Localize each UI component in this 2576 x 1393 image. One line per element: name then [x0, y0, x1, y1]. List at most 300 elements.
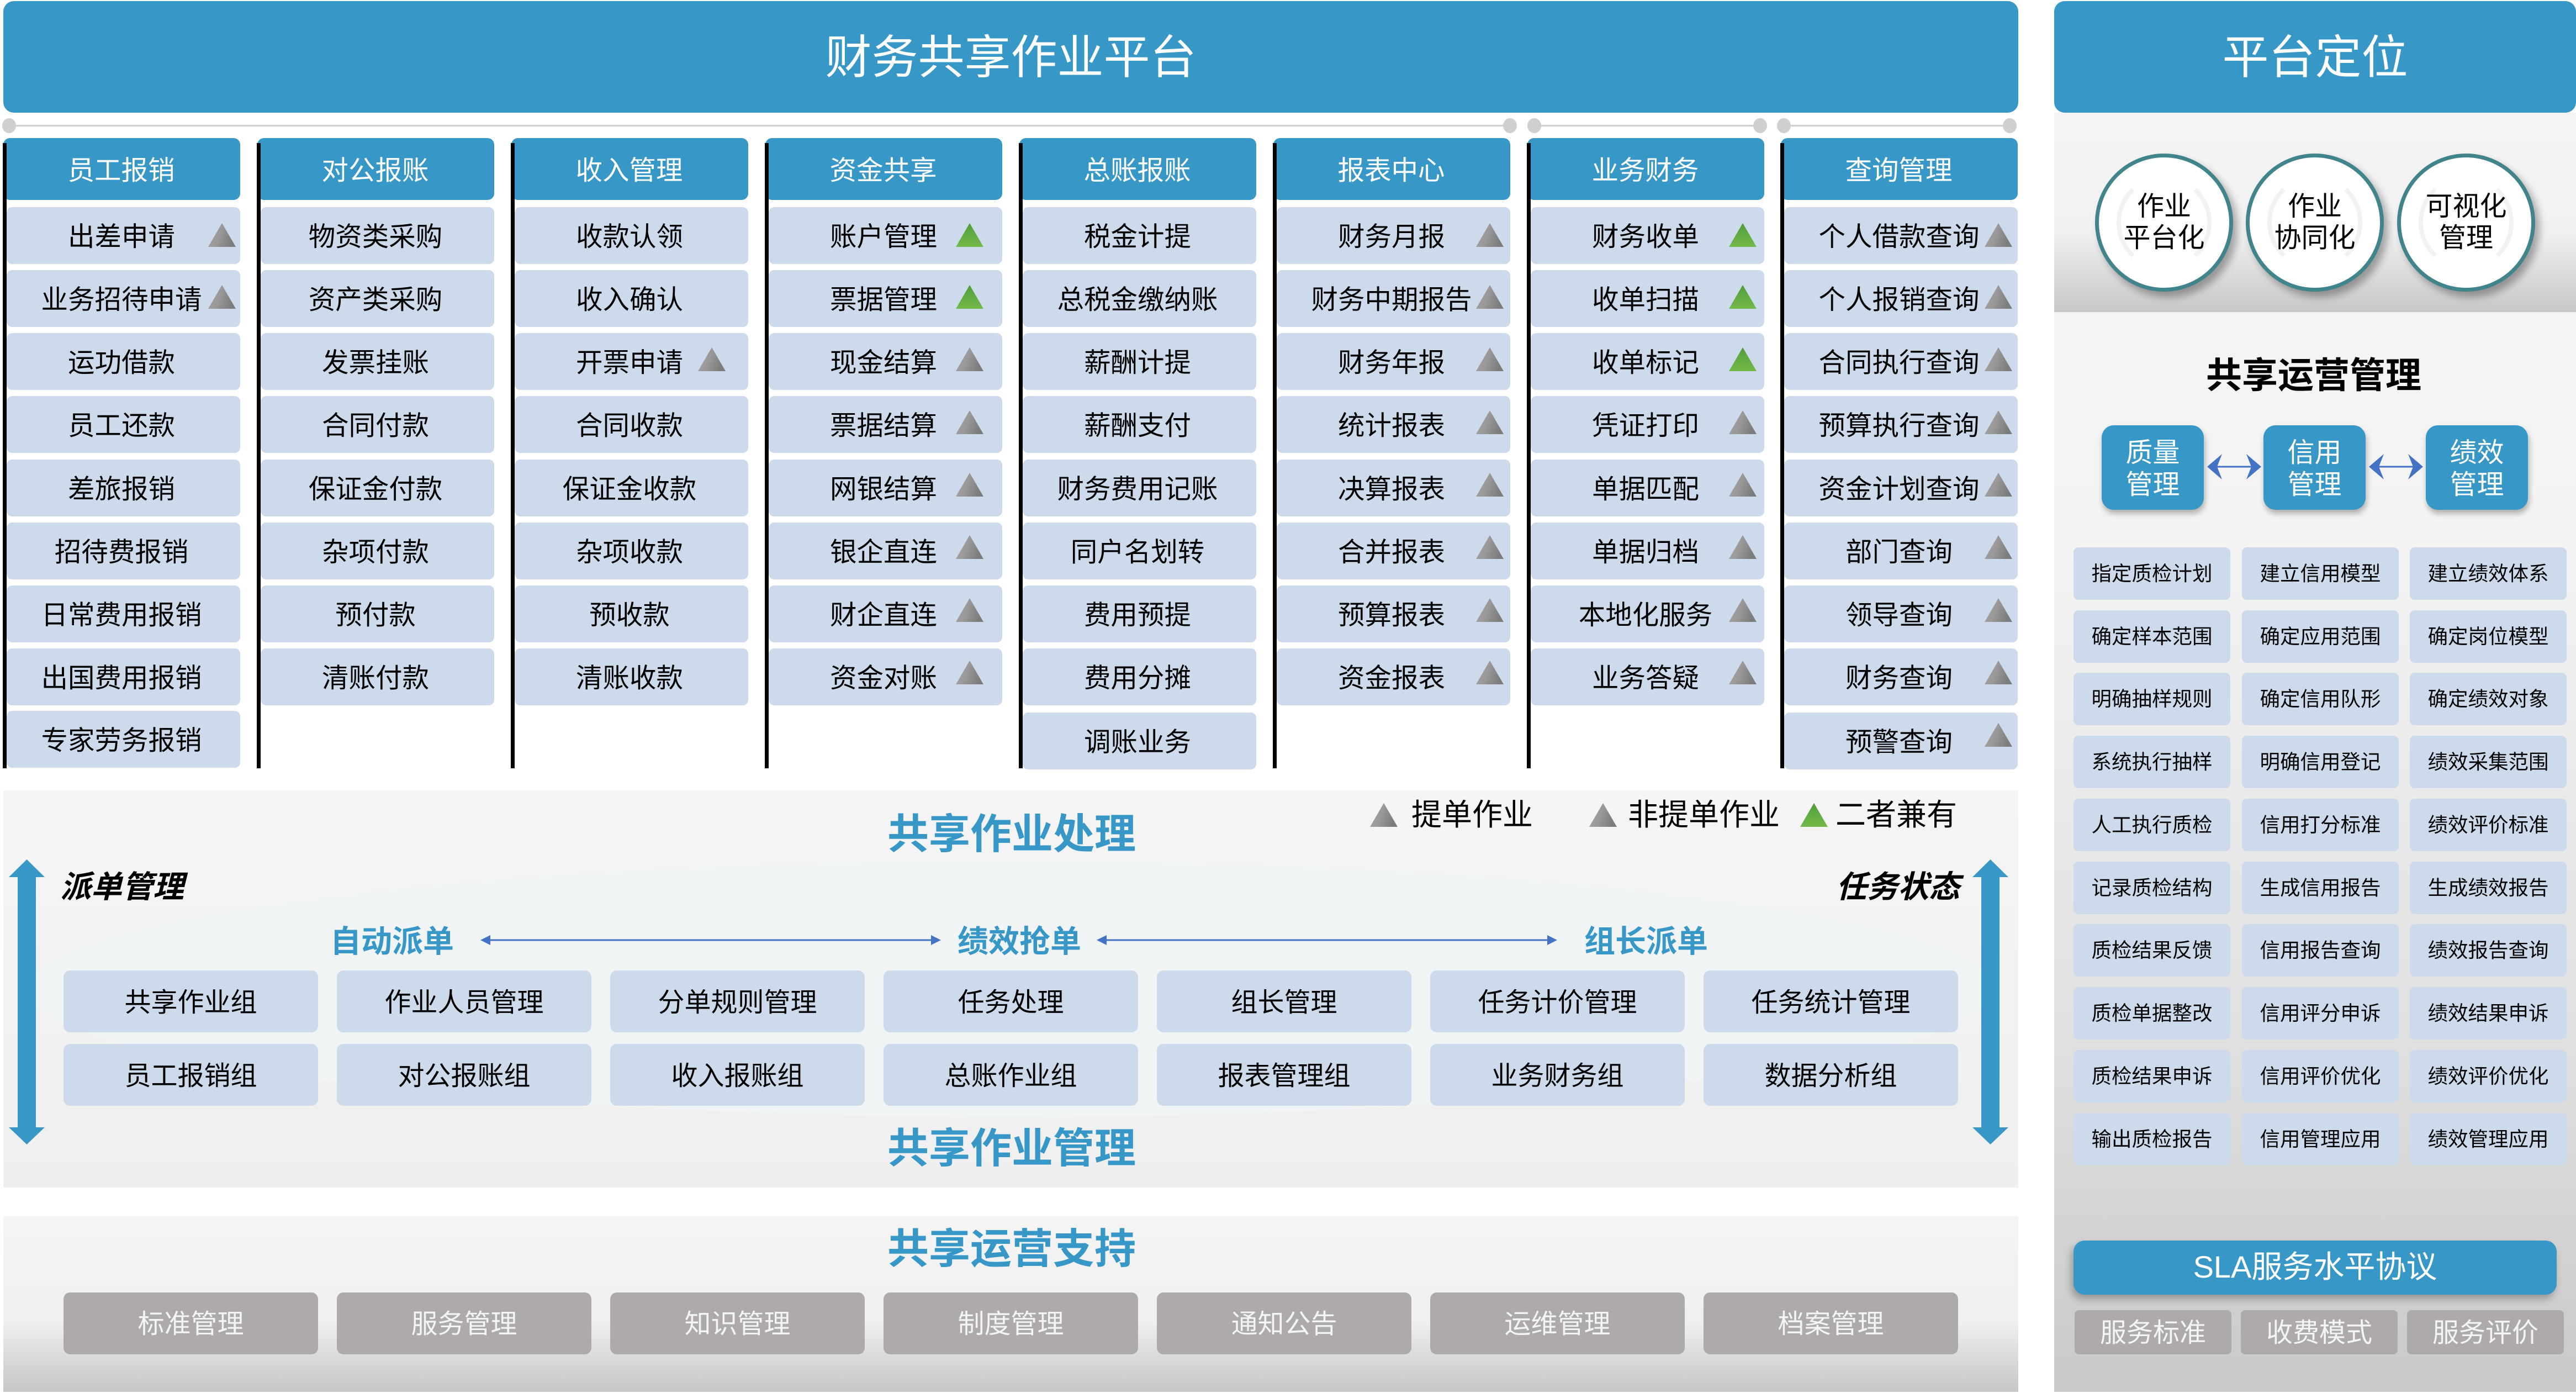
- item: 合同执行查询: [1784, 333, 2018, 390]
- icon: green triangle: [1729, 347, 1757, 371]
- item: 招待费报销: [7, 523, 240, 579]
- item: 收款认领: 收款认领: [576, 222, 683, 252]
- item: 保证金收款: 保证金收款: [563, 474, 696, 504]
- box: 共享作业组: 共享作业组: [124, 988, 257, 1017]
- item: 财务中期报告: 财务中期报告: [1311, 285, 1472, 315]
- item: 财务查询: [1784, 648, 2018, 705]
- icon: grey triangle: [1476, 661, 1504, 684]
- box: 服务管理: 服务管理: [411, 1310, 517, 1339]
- column: 总账报账: [1019, 138, 1256, 769]
- legend icon: 二者兼有: [1800, 803, 1828, 827]
- box: 数据分析组: 数据分析组: [1764, 1062, 1897, 1091]
- item: 领导查询: [1784, 585, 2018, 642]
- icon: grey triangle: [956, 535, 983, 559]
- box: 服务标准: 服务标准: [2100, 1318, 2206, 1348]
- icon: grey triangle: [1476, 285, 1504, 309]
- item: 收入确认: 收入确认: [576, 285, 683, 315]
- item: 运功借款: [7, 333, 240, 390]
- box: 制度管理: 制度管理: [958, 1310, 1064, 1339]
- column header: 查询管理: [1845, 156, 1953, 186]
- item: 收款认领: [515, 207, 748, 264]
- item: 财务收单: [1531, 207, 1764, 264]
- icon: green triangle: [956, 285, 983, 309]
- item: 资金对账: 资金对账: [830, 663, 937, 693]
- box: 标准管理: [64, 1292, 318, 1354]
- box: 质量管理: 质量: [2125, 438, 2180, 468]
- item: 部门查询: [1784, 523, 2018, 579]
- arrow: 信用 to 绩效: [2369, 454, 2423, 479]
- item: 确定信用队形: 确定信用队形: [2260, 688, 2381, 710]
- item: 建立绩效体系: 建立绩效体系: [2427, 562, 2549, 585]
- item: 账户管理: 账户管理: [830, 222, 937, 252]
- box: 信用管理: 信用: [2287, 438, 2341, 468]
- item: 保证金付款: 保证金付款: [309, 474, 442, 504]
- item: 指定质检计划: 指定质检计划: [2092, 562, 2212, 585]
- box: 运维管理: [1430, 1292, 1685, 1354]
- item: 信用评价优化: [2242, 1050, 2399, 1102]
- icon: grey triangle: [208, 223, 236, 247]
- item: 信用管理应用: [2242, 1113, 2399, 1165]
- item: 总税金缴纳账: [1023, 270, 1256, 327]
- item: 招待费报销: 招待费报销: [55, 537, 188, 567]
- item: 生成绩效报告: [2410, 862, 2567, 914]
- panel: 共享运营管理: [2054, 312, 2576, 1392]
- item: 明确抽样规则: 明确抽样规则: [2092, 688, 2212, 710]
- item: 确定信用队形: [2242, 673, 2399, 725]
- item: 员工还款: 员工还款: [68, 411, 175, 441]
- item: 财企直连: [769, 585, 1002, 642]
- icon: grey triangle: [1985, 347, 2012, 371]
- item: 物资类采购: [261, 207, 494, 264]
- icon: grey triangle: [1985, 223, 2012, 247]
- sub-heading: 自动派单: 自动派单: [330, 924, 454, 959]
- box: 分单规则管理: [610, 970, 865, 1032]
- item: 记录质检结构: 记录质检结构: [2092, 877, 2212, 899]
- label: 派单管理: 派单管理: [60, 869, 184, 904]
- item: 质检单据整改: 质检单据整改: [2092, 1002, 2212, 1025]
- box: 通知公告: [1157, 1292, 1411, 1354]
- item: 绩效结果申诉: [2410, 987, 2567, 1040]
- box: 员工报销组: [64, 1044, 318, 1106]
- item: 调账业务: 调账业务: [1084, 727, 1191, 757]
- arrow: 派单管理 vertical: [9, 859, 45, 1144]
- column: 报表中心: [1273, 138, 1510, 768]
- item: 网银结算: [769, 460, 1002, 516]
- box: 报表管理组: [1157, 1044, 1411, 1106]
- box: 总账作业组: [884, 1044, 1138, 1106]
- item: 财企直连: 财企直连: [830, 600, 937, 630]
- legend label: 非提单作业: 非提单作业: [1628, 798, 1780, 832]
- arrow: 质量 to 信用: [2207, 454, 2261, 479]
- icon: grey triangle: [956, 598, 983, 622]
- panel: 共享作业处理与管理: [3, 790, 2018, 1188]
- item: 指定质检计划: [2074, 547, 2230, 600]
- item: 输出质检报告: 输出质检报告: [2092, 1128, 2212, 1151]
- item: 杂项付款: [261, 523, 494, 579]
- item: 本地化服务: 本地化服务: [1579, 600, 1712, 630]
- box: 分单规则管理: 分单规则管理: [658, 988, 817, 1017]
- item: 薪酬计提: 薪酬计提: [1084, 348, 1191, 378]
- item: 人工执行质检: 人工执行质检: [2092, 814, 2212, 836]
- item: 费用分摊: [1023, 648, 1256, 705]
- column header: 资金共享: [829, 156, 937, 186]
- item: 输出质检报告: [2074, 1113, 2230, 1165]
- title: 平台定位: 平台定位: [2222, 31, 2408, 83]
- box: 对公报账组: 对公报账组: [398, 1062, 530, 1091]
- column header: 收入管理: [575, 156, 683, 186]
- box: 任务统计管理: 任务统计管理: [1751, 988, 1911, 1017]
- box: 组长管理: 组长管理: [1231, 988, 1337, 1017]
- box: 服务标准: [2075, 1310, 2231, 1354]
- icon: grey triangle: [1985, 723, 2012, 747]
- title: 平台定位: [2054, 1, 2576, 113]
- icon: grey triangle: [1476, 223, 1504, 247]
- item: 同户名划转: [1023, 523, 1256, 579]
- box: 任务统计管理: [1704, 970, 1958, 1032]
- icon: grey triangle: [956, 473, 983, 497]
- item: 绩效结果申诉: 绩效结果申诉: [2427, 1002, 2549, 1025]
- column header: 业务财务: [1591, 156, 1699, 186]
- item: 开票申请: [515, 333, 748, 390]
- title: 财务共享作业平台: [3, 1, 2018, 113]
- box: 通知公告: 通知公告: [1231, 1310, 1337, 1339]
- box: 收费模式: 收费模式: [2266, 1318, 2372, 1348]
- panel: 共享运营支持: [3, 1216, 2018, 1392]
- item: 清账收款: [515, 648, 748, 705]
- item: 人工执行质检: [2074, 799, 2230, 851]
- item: 合同付款: 合同付款: [322, 411, 429, 441]
- column header: [1273, 138, 1510, 200]
- box: 绩效管理: 绩效: [2450, 438, 2504, 468]
- heading: 共享运营管理: 共享运营管理: [2206, 355, 2421, 395]
- circle: 作业协同化: 作业: [2288, 192, 2342, 221]
- box: 质量管理: [2102, 425, 2204, 510]
- box: 服务管理: [337, 1292, 591, 1354]
- arrow: 自动派单 to 绩效抢单: [480, 933, 941, 947]
- item: 出国费用报销: [7, 648, 240, 705]
- item: 薪酬支付: 薪酬支付: [1084, 411, 1191, 441]
- connector line: left segment: [2, 118, 1517, 133]
- box: 信用管理: 管理: [2287, 470, 2341, 500]
- item: 信用打分标准: [2242, 799, 2399, 851]
- column: 员工报销: [3, 138, 240, 768]
- item: 凭证打印: 凭证打印: [1592, 411, 1699, 441]
- item: 系统执行抽样: 系统执行抽样: [2092, 751, 2212, 773]
- item: 资金计划查询: [1784, 460, 2018, 516]
- item: 财务月报: 财务月报: [1338, 222, 1445, 252]
- icon: green triangle: [1729, 285, 1757, 309]
- legend icon: 提单作业: [1370, 803, 1398, 827]
- icon: grey triangle: [1729, 535, 1757, 559]
- banner: SLA服务水平协议: [2074, 1241, 2557, 1295]
- item: 预算执行查询: 预算执行查询: [1818, 411, 1979, 441]
- item: 资产类采购: 资产类采购: [309, 285, 442, 315]
- item: 信用管理应用: 信用管理应用: [2260, 1128, 2381, 1151]
- legend label: 二者兼有: 二者兼有: [1836, 798, 1957, 832]
- item: 清账付款: 清账付款: [322, 663, 429, 693]
- item: 合同付款: [261, 396, 494, 453]
- item: 薪酬支付: [1023, 396, 1256, 453]
- item: 出差申请: [7, 207, 240, 264]
- item: 绩效报告查询: 绩效报告查询: [2427, 939, 2549, 962]
- item: 业务招待申请: [7, 270, 240, 327]
- item: 个人报销查询: 个人报销查询: [1818, 285, 1979, 315]
- box: 作业人员管理: [337, 970, 591, 1032]
- item: 保证金付款: [261, 460, 494, 516]
- item: 网银结算: 网银结算: [830, 474, 937, 504]
- item: 记录质检结构: [2074, 862, 2230, 914]
- item: 合并报表: 合并报表: [1338, 537, 1445, 567]
- item: 预付款: 预付款: [335, 600, 416, 630]
- box: 组长管理: [1157, 970, 1411, 1032]
- icon: grey triangle: [1985, 661, 2012, 684]
- item: 差旅报销: [7, 460, 240, 516]
- icon: green triangle: [1729, 223, 1757, 247]
- item: 预警查询: 预警查询: [1845, 727, 1953, 757]
- box: 数据分析组: [1704, 1044, 1958, 1106]
- box: 服务评价: [2407, 1310, 2564, 1354]
- arrow: 任务状态 vertical: [1972, 859, 2008, 1144]
- item: 个人借款查询: 个人借款查询: [1818, 222, 1979, 252]
- item: 本地化服务: [1531, 585, 1764, 642]
- icon: grey triangle: [1729, 410, 1757, 434]
- icon: grey triangle: [1985, 598, 2012, 622]
- item: 质检结果反馈: [2074, 924, 2230, 977]
- item: 资金计划查询: 资金计划查询: [1818, 474, 1979, 504]
- box: 质量管理: 管理: [2125, 470, 2180, 500]
- label: 任务状态: 任务状态: [1836, 869, 1960, 904]
- circle: 可视化管理: 可视化: [2425, 192, 2507, 221]
- box: 绩效管理: 管理: [2450, 470, 2504, 500]
- item: 预收款: [515, 585, 748, 642]
- column: 收入管理: [511, 138, 748, 768]
- item: 财务费用记账: [1023, 460, 1256, 516]
- item: 财务年报: [1277, 333, 1510, 390]
- item: 税金计提: [1023, 207, 1256, 264]
- panel: 平台定位 circles: [2054, 113, 2576, 312]
- item: 单据归档: [1531, 523, 1764, 579]
- item: 预算执行查询: [1784, 396, 2018, 453]
- icon: grey triangle: [956, 347, 983, 371]
- item: 建立信用模型: [2242, 547, 2399, 600]
- box: 收费模式: [2241, 1310, 2398, 1354]
- banner: SLA服务水平协议: SLA服务水平协议: [2193, 1249, 2437, 1284]
- item: 票据结算: [769, 396, 1002, 453]
- item: 明确抽样规则: [2074, 673, 2230, 725]
- item: 杂项收款: [515, 523, 748, 579]
- icon: grey triangle: [1476, 473, 1504, 497]
- box: 员工报销组: 员工报销组: [124, 1062, 257, 1091]
- icon: grey triangle: [208, 285, 236, 309]
- column header: 总账报账: [1083, 156, 1191, 186]
- box: 绩效管理: [2426, 425, 2528, 510]
- icon: grey triangle: [1476, 535, 1504, 559]
- icon: green triangle: [956, 223, 983, 247]
- item: 专家劳务报销: 专家劳务报销: [41, 726, 202, 756]
- item: 差旅报销: 差旅报销: [68, 474, 175, 504]
- item: 确定岗位模型: 确定岗位模型: [2427, 625, 2549, 648]
- item: 业务答疑: 业务答疑: [1592, 663, 1699, 693]
- circle: 作业协同化: [2246, 154, 2384, 292]
- item: 绩效评价标准: 绩效评价标准: [2427, 814, 2549, 836]
- circle: 作业平台化: 作业: [2137, 192, 2191, 221]
- item: 部门查询: 部门查询: [1845, 537, 1953, 567]
- item: 清账付款: [261, 648, 494, 705]
- box: 作业人员管理: 作业人员管理: [384, 988, 543, 1017]
- box: 收入报账组: 收入报账组: [671, 1062, 804, 1091]
- legend: [1370, 801, 1958, 829]
- item: 预警查询: [1784, 713, 2018, 769]
- icon: grey triangle: [1476, 598, 1504, 622]
- item: 确定样本范围: 确定样本范围: [2092, 625, 2212, 648]
- item: 领导查询: 领导查询: [1845, 600, 1953, 630]
- box: 总账作业组: 总账作业组: [944, 1062, 1077, 1091]
- item: 收入确认: [515, 270, 748, 327]
- item: 建立信用模型: 建立信用模型: [2260, 562, 2381, 585]
- item: 资产类采购: [261, 270, 494, 327]
- icon: grey triangle: [956, 661, 983, 684]
- item: 信用打分标准: 信用打分标准: [2260, 814, 2381, 836]
- item: 开票申请: 开票申请: [576, 348, 683, 378]
- item: 出国费用报销: 出国费用报销: [41, 663, 202, 693]
- item: 质检结果申诉: [2074, 1050, 2230, 1102]
- column: 资金共享: [765, 138, 1002, 768]
- item: 信用评分申诉: [2242, 987, 2399, 1040]
- box: 运维管理: 运维管理: [1504, 1310, 1610, 1339]
- item: 预付款: [261, 585, 494, 642]
- item: 现金结算: [769, 333, 1002, 390]
- item: 日常费用报销: 日常费用报销: [41, 600, 202, 630]
- column header: 对公报账: [321, 156, 429, 186]
- item: 出差申请: 出差申请: [68, 222, 175, 252]
- item: 收单标记: [1531, 333, 1764, 390]
- item: 日常费用报销: [7, 585, 240, 642]
- item: 绩效评价优化: 绩效评价优化: [2427, 1065, 2549, 1088]
- icon: grey triangle: [1985, 535, 2012, 559]
- box: 标准管理: 标准管理: [137, 1310, 244, 1339]
- item: 确定绩效对象: [2410, 673, 2567, 725]
- item: 绩效管理应用: 绩效管理应用: [2427, 1128, 2549, 1151]
- item: 确定应用范围: [2242, 610, 2399, 663]
- item: 收单扫描: [1531, 270, 1764, 327]
- icon: grey triangle: [1985, 473, 2012, 497]
- icon: grey triangle: [1729, 661, 1757, 684]
- item: 统计报表: 统计报表: [1338, 411, 1445, 441]
- item: 发票挂账: 发票挂账: [322, 348, 429, 378]
- box: 档案管理: 档案管理: [1778, 1310, 1884, 1339]
- item: 收单扫描: 收单扫描: [1592, 285, 1699, 315]
- item: 单据匹配: [1531, 460, 1764, 516]
- item: 资金对账: [769, 648, 1002, 705]
- item: 财务月报: [1277, 207, 1510, 264]
- item: 生成信用报告: 生成信用报告: [2260, 877, 2381, 899]
- column: 查询管理: [1780, 138, 2018, 770]
- box: 任务计价管理: 任务计价管理: [1478, 988, 1637, 1017]
- item: 合并报表: [1277, 523, 1510, 579]
- item: 决算报表: [1277, 460, 1510, 516]
- heading: 共享作业处理: 共享作业处理: [887, 811, 1136, 857]
- item: 生成信用报告: [2242, 862, 2399, 914]
- box: 任务计价管理: [1430, 970, 1685, 1032]
- item: 个人报销查询: [1784, 270, 2018, 327]
- item: 单据匹配: 单据匹配: [1592, 474, 1699, 504]
- item: 银企直连: [769, 523, 1002, 579]
- item: 调账业务: [1023, 713, 1256, 769]
- item: 发票挂账: [261, 333, 494, 390]
- item: 物资类采购: 物资类采购: [309, 222, 442, 252]
- item: 建立绩效体系: [2410, 547, 2567, 600]
- item: 财务年报: 财务年报: [1338, 348, 1445, 378]
- item: 资金报表: [1277, 648, 1510, 705]
- item: 合同收款: 合同收款: [576, 411, 683, 441]
- item: 保证金收款: [515, 460, 748, 516]
- sub-heading: 组长派单: 组长派单: [1584, 924, 1708, 959]
- column header: 报表中心: [1337, 156, 1445, 186]
- item: 统计报表: [1277, 396, 1510, 453]
- heading: 共享作业管理: 共享作业管理: [887, 1125, 1136, 1172]
- legend label: 提单作业: 提单作业: [1411, 798, 1533, 832]
- box: 报表管理组: 报表管理组: [1218, 1062, 1351, 1091]
- box: 知识管理: [610, 1292, 865, 1354]
- item: 预收款: 预收款: [589, 600, 670, 630]
- column: 对公报账: [257, 138, 494, 768]
- item: 质检结果反馈: 质检结果反馈: [2092, 939, 2212, 962]
- item: 凭证打印: [1531, 396, 1764, 453]
- circle: 作业平台化: 平台化: [2123, 223, 2204, 253]
- box: 知识管理: 知识管理: [684, 1310, 791, 1339]
- item: 决算报表: 决算报表: [1338, 474, 1445, 504]
- item: 费用预提: [1023, 585, 1256, 642]
- box: 对公报账组: [337, 1044, 591, 1106]
- item: 绩效采集范围: 绩效采集范围: [2427, 751, 2549, 773]
- item: 收单标记: 收单标记: [1592, 348, 1699, 378]
- item: 费用预提: 费用预提: [1084, 600, 1191, 630]
- icon: grey triangle: [1729, 473, 1757, 497]
- box: 收入报账组: [610, 1044, 865, 1106]
- circle: 作业协同化: 协同化: [2274, 223, 2356, 253]
- icon: grey triangle: [1729, 598, 1757, 622]
- column header: [3, 138, 240, 200]
- icon: grey triangle: [956, 410, 983, 434]
- column header: [765, 138, 1002, 200]
- item: 确定应用范围: 确定应用范围: [2260, 625, 2381, 648]
- item: 薪酬计提: [1023, 333, 1256, 390]
- column: 业务财务: [1527, 138, 1764, 770]
- item: 票据结算: 票据结算: [830, 411, 937, 441]
- item: 票据管理: 票据管理: [830, 285, 937, 315]
- item: 财务中期报告: [1277, 270, 1510, 327]
- box: 信用管理: [2263, 425, 2366, 510]
- item: 确定样本范围: [2074, 610, 2230, 663]
- icon: grey triangle: [1985, 410, 2012, 434]
- item: 业务招待申请: 业务招待申请: [41, 285, 202, 315]
- connector line: right segment: [1777, 118, 2017, 133]
- column header: [1781, 138, 2018, 200]
- icon: grey triangle: [1985, 285, 2012, 309]
- item: 信用评分申诉: 信用评分申诉: [2260, 1002, 2381, 1025]
- circle: 可视化管理: 管理: [2439, 223, 2493, 253]
- item: 银企直连: 银企直连: [830, 537, 937, 567]
- box: 业务财务组: [1430, 1044, 1685, 1106]
- box: 业务财务组: 业务财务组: [1491, 1062, 1623, 1091]
- icon: grey triangle: [1476, 347, 1504, 371]
- item: 质检结果申诉: 质检结果申诉: [2092, 1065, 2212, 1088]
- box: 任务处理: 任务处理: [958, 988, 1064, 1017]
- item: 个人借款查询: [1784, 207, 2018, 264]
- box: 档案管理: [1704, 1292, 1958, 1354]
- item: 绩效报告查询: [2410, 924, 2567, 977]
- item: 合同执行查询: 合同执行查询: [1818, 348, 1979, 378]
